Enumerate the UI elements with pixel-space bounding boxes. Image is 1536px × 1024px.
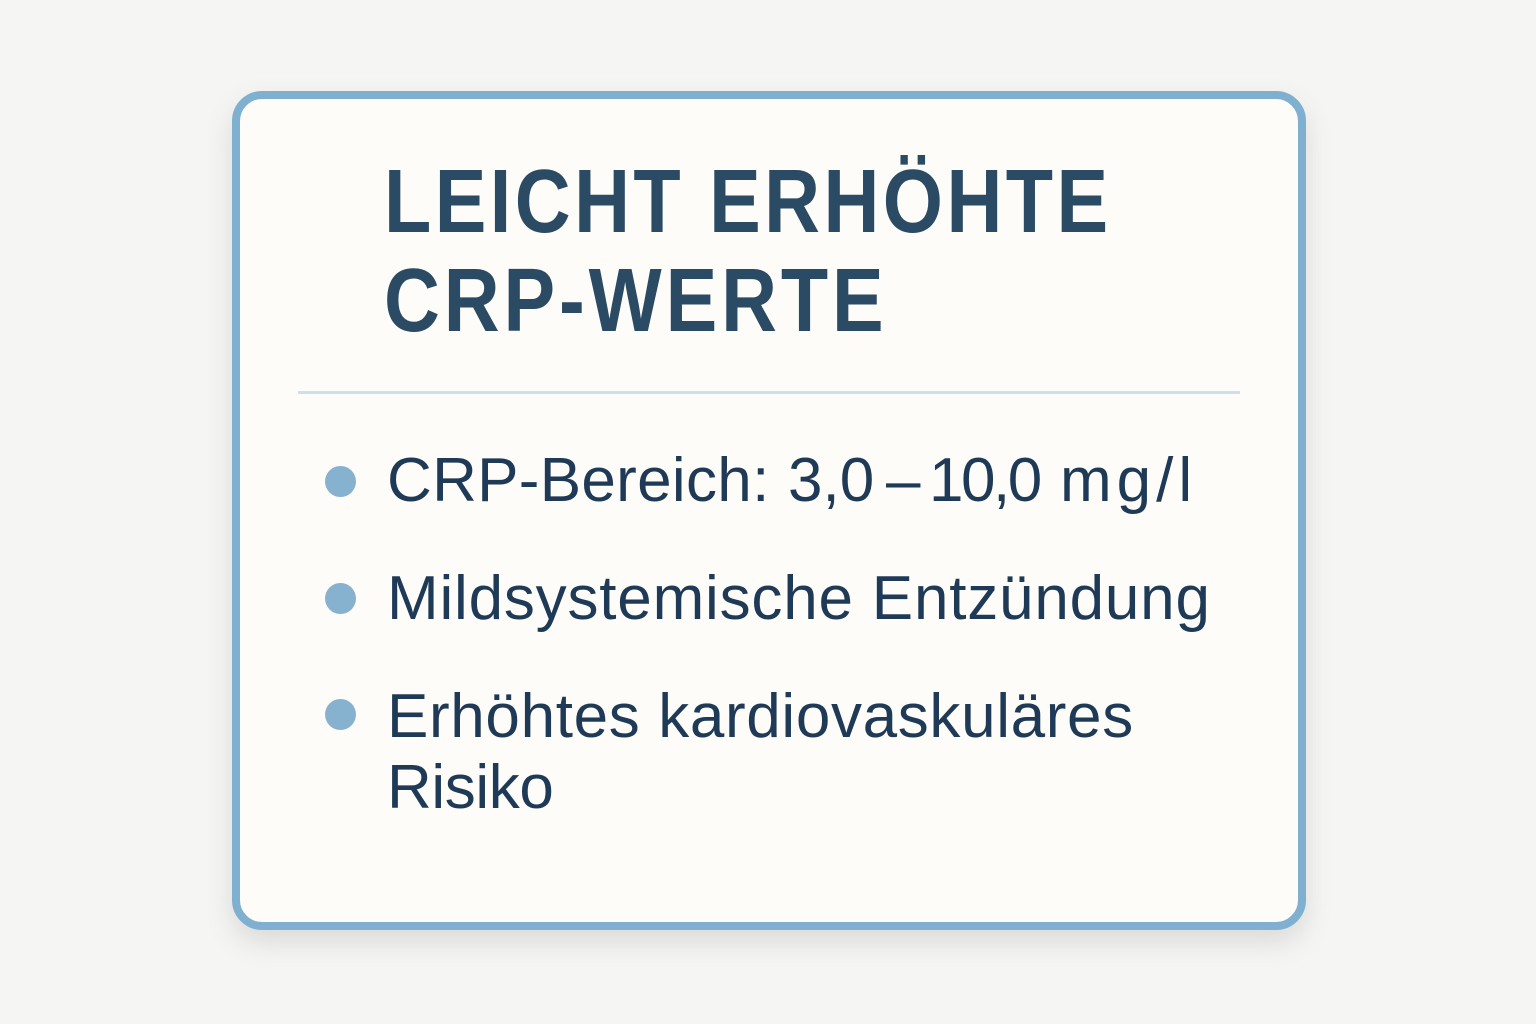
text: risk: Risiko xyxy=(387,753,553,822)
text: CRP range: – xyxy=(886,446,920,515)
title xyxy=(384,152,1112,351)
panel: card xyxy=(232,91,1306,930)
bullet: inflammation xyxy=(325,583,356,614)
title: CRP-WERTE xyxy=(384,251,888,351)
text: CRP range: 10,0 xyxy=(929,446,1040,515)
text: risk: Erhöhtes kardiovaskuläres xyxy=(387,682,1134,751)
bullet: CRP range xyxy=(325,466,356,497)
text: inflammation: Mildsystemische Entzündung xyxy=(387,564,1211,633)
title: LEICHT ERHÖHTE xyxy=(384,152,1112,252)
text: risk xyxy=(387,682,1134,822)
text: CRP range: CRP-Bereich: xyxy=(387,446,770,515)
text: CRP range: 3,0 xyxy=(788,446,874,515)
bullet: risk xyxy=(325,699,356,730)
text: CRP range: mg/l xyxy=(1060,446,1197,515)
text: CRP range xyxy=(387,446,1197,515)
